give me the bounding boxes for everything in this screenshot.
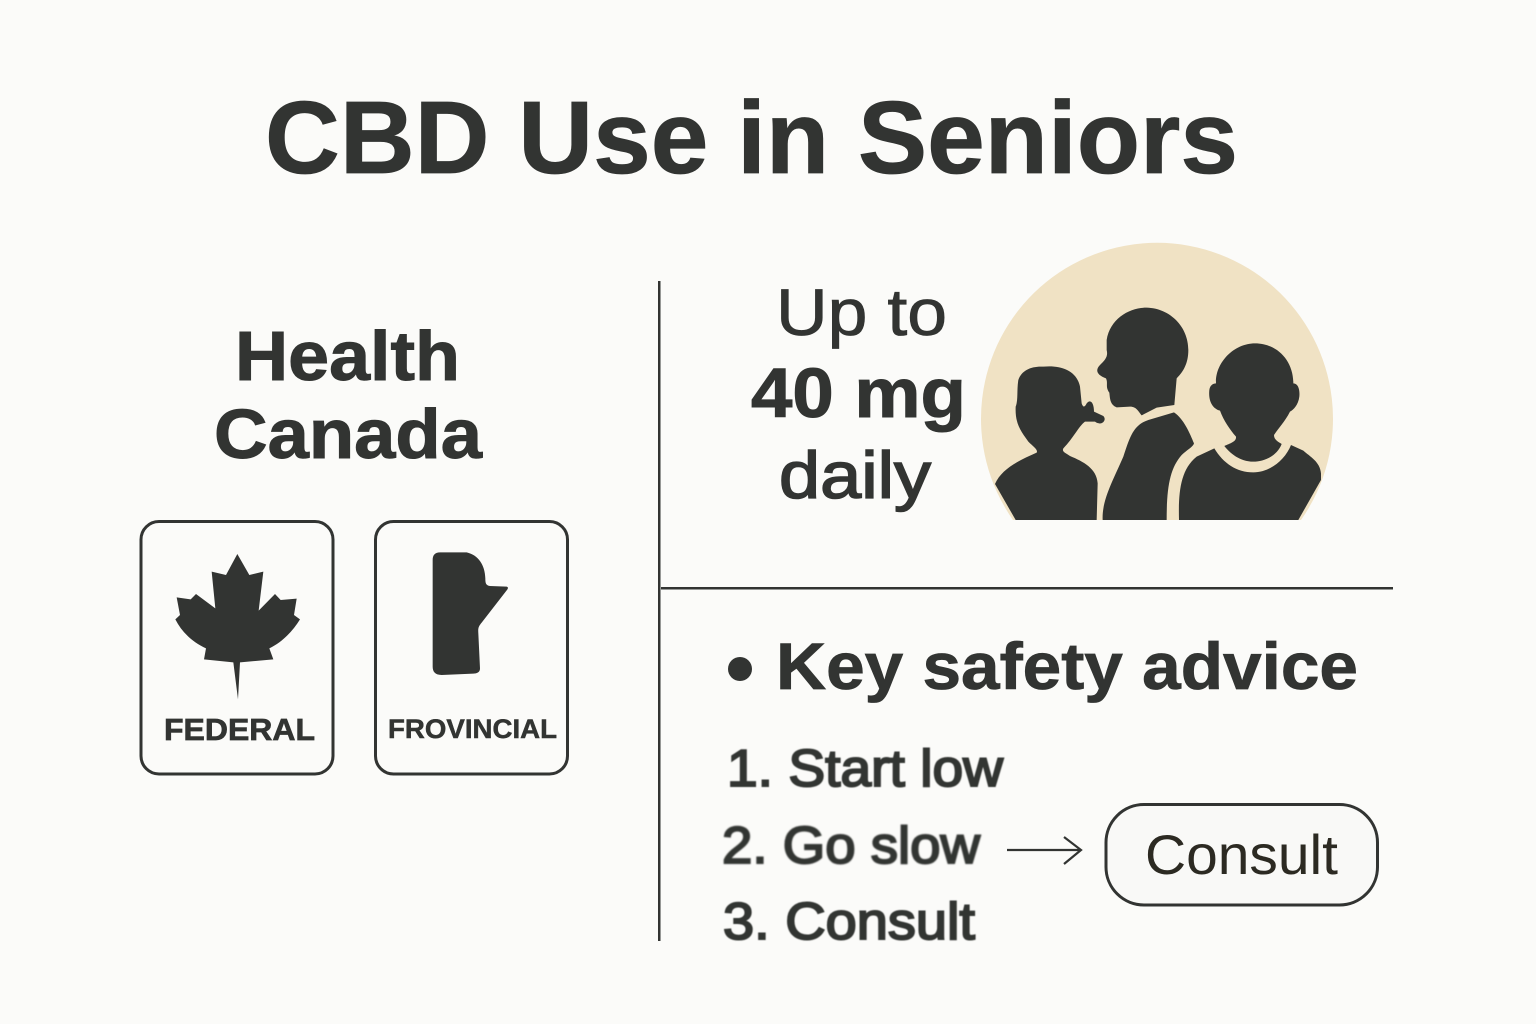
text: up to 40 mg daily — [751, 275, 966, 512]
list: advice steps: 1. Start low — [727, 740, 1003, 798]
heading: key safety advice: Key safety advice — [776, 629, 1358, 703]
icon: province silhouette — [433, 552, 508, 675]
heading: Health Canada — [214, 317, 483, 473]
panel: key safety advice — [722, 629, 1378, 951]
panel: Health Canada jurisdiction — [141, 317, 568, 774]
vertical divider — [658, 281, 660, 941]
label: federal: FEDERAL — [164, 712, 315, 747]
arrow — [1007, 837, 1081, 864]
heading: Health Canada: Canada — [214, 395, 483, 473]
panel: dosage — [751, 243, 1333, 520]
icon: seniors silhouettes on cream circle — [981, 243, 1333, 520]
text: up to 40 mg daily: Up to — [776, 275, 947, 349]
list: advice steps: 2. Go slow — [722, 817, 980, 875]
list: advice steps: 3. Consult — [723, 893, 976, 951]
card: provincial — [376, 522, 568, 774]
text: up to 40 mg daily: 40 mg — [751, 354, 966, 432]
title: CBD Use in Seniors — [265, 80, 1238, 195]
card: federal — [141, 522, 333, 774]
callout: consult: Consult — [1145, 823, 1338, 886]
label: provincial: FROVINCIAL — [388, 714, 557, 744]
icon: maple leaf — [175, 554, 300, 699]
heading: Health Canada: Health — [235, 317, 460, 395]
text: up to 40 mg daily: daily — [779, 438, 931, 512]
list: advice steps — [722, 740, 1003, 951]
callout: consult — [1106, 804, 1378, 905]
horizontal divider — [661, 587, 1393, 590]
